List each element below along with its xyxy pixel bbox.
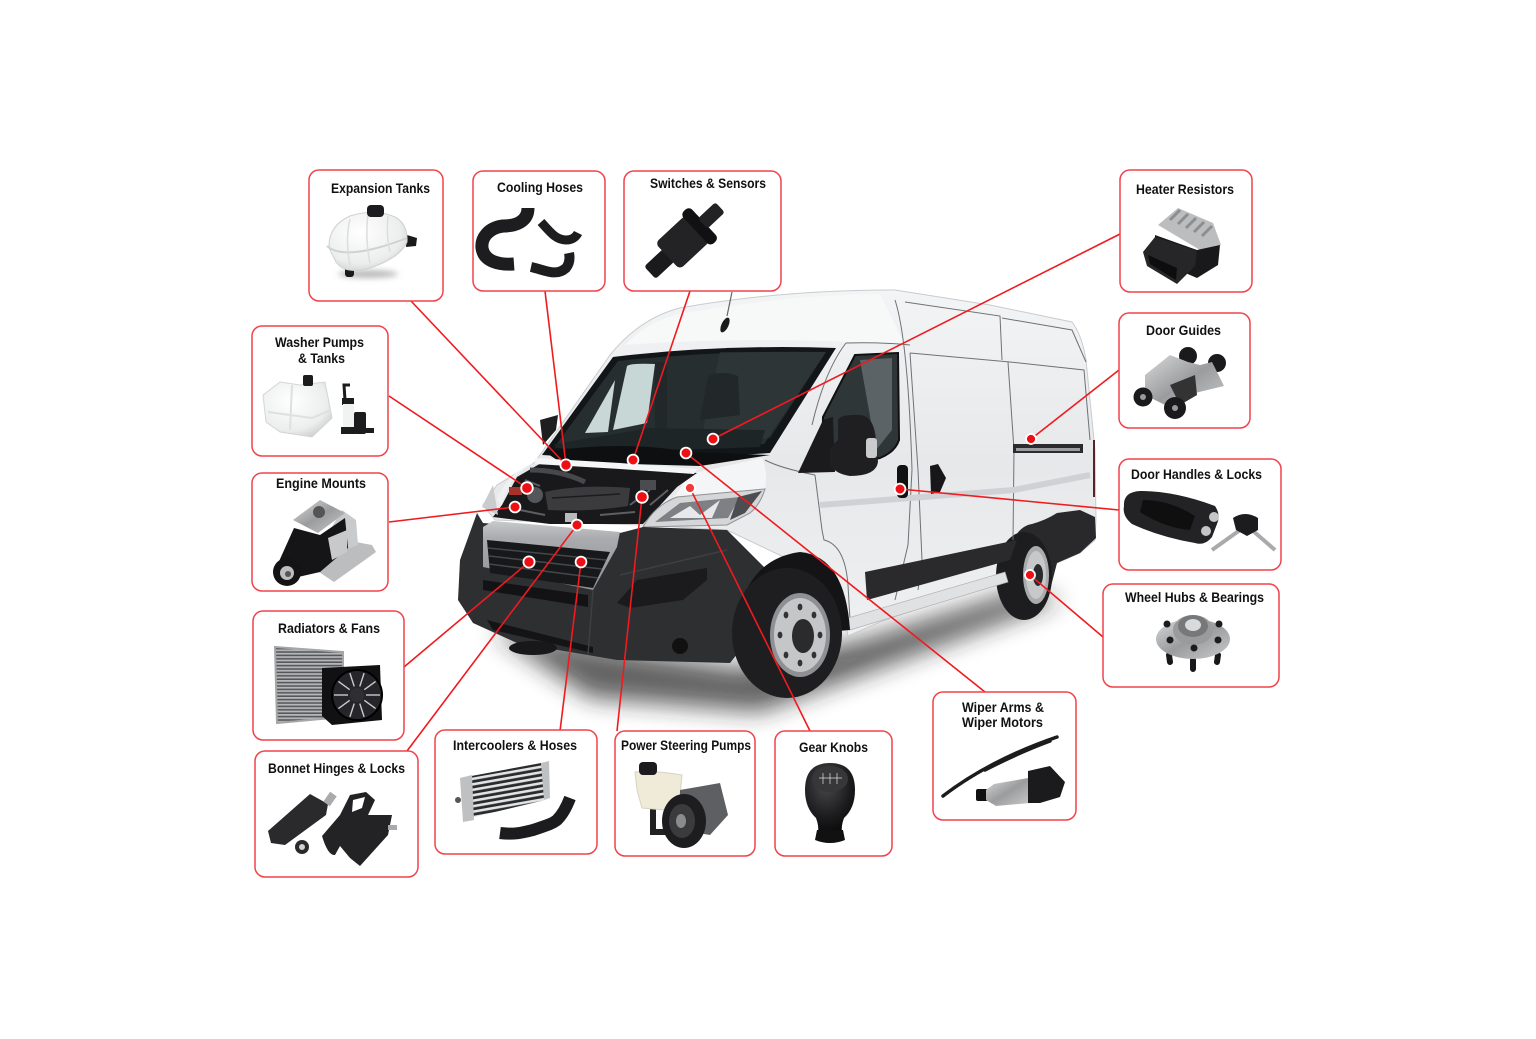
windshield (542, 347, 836, 458)
heading: Washer Pumps (275, 334, 364, 350)
icon: engine mount (273, 500, 376, 586)
roof highlight (625, 294, 905, 345)
panel: wheel hubs and bearings (1103, 584, 1279, 687)
wheel arch (735, 552, 850, 640)
sliding door handle (930, 464, 946, 494)
leader lines (389, 234, 1120, 751)
panel: door guides (1119, 313, 1250, 428)
icon: lock bracket (322, 792, 397, 866)
icon: sensor (635, 191, 735, 289)
left headlight (482, 485, 498, 515)
panel: gear knobs (775, 731, 892, 856)
panel: intercoolers and hoses (435, 730, 597, 854)
icon: door handle (1124, 491, 1219, 544)
panel: power steering pumps (615, 731, 755, 856)
wipers (545, 446, 770, 466)
panel: switches and sensors (624, 171, 781, 291)
heading: Door Guides (1146, 322, 1221, 338)
location dots (510, 434, 1036, 580)
side intake (617, 568, 707, 608)
heading: Wiper Motors (962, 714, 1043, 730)
panel: washer pumps and tanks (252, 326, 388, 456)
panel: heater resistors (1120, 170, 1252, 292)
icon: fan (322, 665, 382, 725)
panel: bonnet hinges and locks (255, 751, 418, 877)
heading: Bonnet Hinges & Locks (268, 760, 405, 776)
heading: Wheel Hubs & Bearings (1125, 589, 1264, 605)
side window (822, 353, 899, 470)
open bonnet edge (535, 458, 697, 474)
icon: hose (500, 798, 570, 834)
panel: wiper arms and motors (933, 692, 1076, 820)
panel: door handles and locks (1119, 459, 1281, 570)
bumper crease (588, 550, 727, 655)
door handle (897, 465, 908, 498)
icon: wiper arm (943, 737, 1057, 796)
door rail (1013, 444, 1083, 453)
side sill (865, 540, 1017, 600)
heading: Gear Knobs (799, 739, 868, 755)
icon: hinge (268, 792, 337, 854)
icon: wiper motor (976, 766, 1065, 806)
icon: hoses (482, 208, 578, 272)
heading: Power Steering Pumps (621, 737, 751, 753)
heading: Engine Mounts (276, 475, 366, 491)
under bumper wheel (509, 641, 557, 655)
icon: wheel hub (1156, 615, 1230, 669)
lower vent (483, 580, 588, 607)
fog light (672, 638, 688, 654)
left mirror (540, 415, 558, 445)
heading: Expansion Tanks (331, 180, 430, 196)
heading: Cooling Hoses (497, 179, 583, 195)
icon: door guide (1134, 347, 1226, 419)
engine bay (493, 462, 697, 524)
rear wheel arch and dark corner (1005, 510, 1096, 600)
panel: radiators and fans (253, 611, 404, 740)
heading (962, 699, 1044, 730)
heading: Wiper Arms & (962, 699, 1044, 715)
heading: Door Handles & Locks (1131, 466, 1262, 482)
panel: cooling hoses (473, 171, 605, 291)
ground shadow (490, 590, 1062, 712)
body crease (820, 475, 1090, 505)
fender (672, 458, 766, 500)
icon: pump (635, 762, 728, 848)
front bumper (458, 513, 770, 663)
icon: keys (1212, 514, 1275, 550)
headlight (643, 489, 765, 527)
heading: & Tanks (298, 350, 345, 366)
heading (275, 334, 364, 366)
door mirror (798, 415, 878, 476)
heading: Switches & Sensors (650, 175, 766, 191)
heading: Intercoolers & Hoses (453, 737, 577, 753)
heading: Heater Resistors (1136, 181, 1234, 197)
grille surround (483, 521, 620, 590)
panel: engine mounts (252, 473, 388, 591)
tail light edge (1093, 440, 1095, 497)
grille (487, 540, 610, 588)
icon: intercooler (455, 761, 550, 822)
window reflection (860, 358, 892, 450)
lower intake (487, 620, 593, 653)
van (458, 290, 1096, 698)
icon: heater resistor (1143, 208, 1221, 284)
rear wheel (996, 532, 1052, 620)
icon: washer tank (263, 375, 332, 437)
heading: Radiators & Fans (278, 620, 380, 636)
icon: radiator (275, 647, 343, 723)
panel lines (765, 300, 1090, 620)
icon: gear knob (805, 763, 855, 843)
lower sill strip (848, 572, 1008, 630)
icon: washer pump (341, 385, 374, 434)
van body shell (483, 290, 1096, 636)
antenna (718, 292, 732, 334)
icon: expansion tank (327, 205, 417, 278)
front wheel (732, 568, 842, 698)
panel: expansion tanks (309, 170, 443, 301)
